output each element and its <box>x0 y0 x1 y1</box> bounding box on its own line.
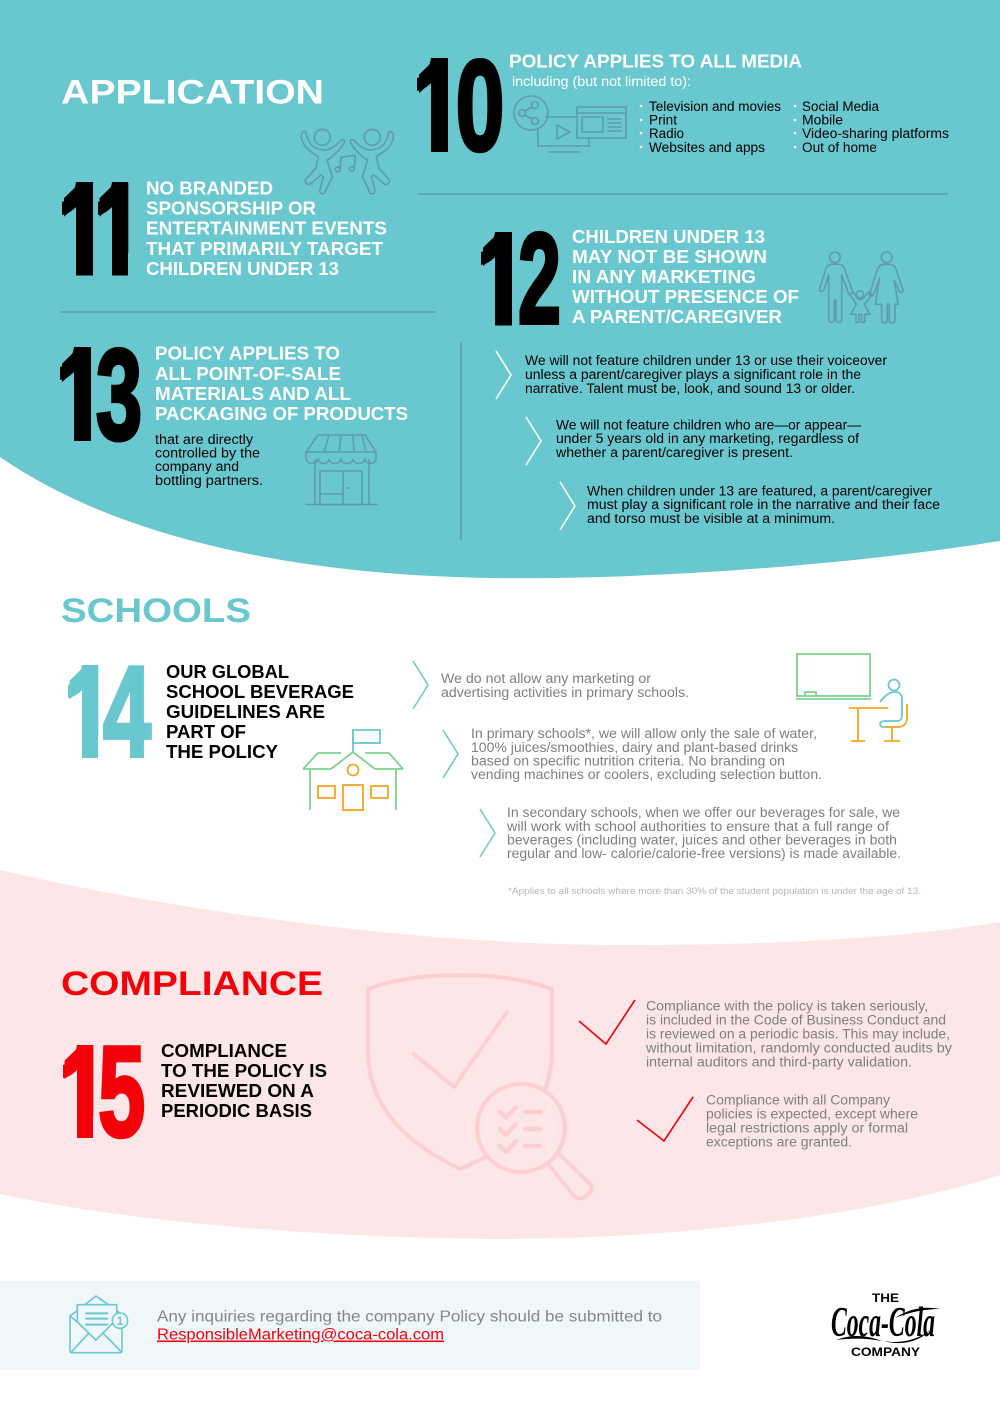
icon: check <box>579 1000 635 1044</box>
heading 11: CHILDREN UNDER 13 <box>146 259 339 279</box>
media list right column: Social Media <box>802 99 879 114</box>
media list right column: Mobile <box>802 112 843 128</box>
heading 12 <box>572 227 799 327</box>
bullet: no children under 5 <box>526 417 862 465</box>
text: We will not feature children under 13 or use their voiceover <box>525 353 888 368</box>
text: When children under 13 are featured, a parent/caregiver <box>587 484 933 498</box>
text <box>441 671 689 700</box>
heading 15: PERIODIC BASIS <box>161 1101 312 1121</box>
heading 14: OUR GLOBAL <box>166 662 289 682</box>
heading 11: SPONSORSHIP OR <box>146 198 316 218</box>
text 13 <box>155 432 263 488</box>
bullet: parent must play significant role <box>560 482 940 530</box>
heading 14 <box>166 662 354 762</box>
text: must play a significant role in the narrative and their face <box>587 497 940 512</box>
text: is included in the Code of Business Conduct and <box>646 1012 946 1028</box>
icon: school building <box>303 730 403 810</box>
footnote: *Applies to all schools where more than 30% of the student population is under the age of 13. <box>508 886 921 897</box>
text: internal auditors and third-party validation. <box>646 1054 912 1070</box>
heading 15: COMPLIANCE <box>161 1041 287 1061</box>
text <box>706 1092 918 1150</box>
text 13: company and <box>155 459 239 474</box>
heading 10: POLICY APPLIES TO ALL MEDIA <box>509 52 802 72</box>
bullet: primary school drinks <box>443 726 822 782</box>
text 13: bottling partners. <box>155 473 263 488</box>
heading 11: THAT PRIMARILY TARGET <box>146 239 383 259</box>
heading 12: WITHOUT PRESENCE OF <box>572 287 799 307</box>
text: We will not feature children who are—or appear— <box>556 418 862 432</box>
heading 13: MATERIALS AND ALL <box>155 384 351 404</box>
heading 12: MAY NOT BE SHOWN <box>572 247 767 267</box>
icon: family <box>820 252 903 323</box>
text: We do not allow any marketing or <box>441 671 652 686</box>
text: In primary schools*, we will allow only the sale of water, <box>471 726 817 741</box>
number 13: 1 <box>58 323 106 467</box>
text <box>587 484 940 526</box>
text: vending machines or coolers, excluding selection button. <box>471 767 822 782</box>
icon: dancing children <box>301 129 393 194</box>
media list left column: Print <box>649 112 677 128</box>
text: is reviewed on a periodic basis. This may include, <box>646 1026 950 1042</box>
chevron <box>496 351 511 399</box>
text <box>506 805 901 861</box>
chevron <box>443 730 458 778</box>
media list left column <box>640 99 781 155</box>
text: under 5 years old in any marketing, regardless of <box>556 431 859 446</box>
panel: contact footer <box>0 1281 700 1370</box>
number 11: 1 <box>95 158 143 302</box>
text: In secondary schools, when we offer our beverages for sale, we <box>507 805 900 820</box>
bullet: no children under 13 voiceover <box>496 351 888 399</box>
heading 11: ENTERTAINMENT EVENTS <box>146 219 387 239</box>
number 13: 3 <box>96 323 142 467</box>
panel: application background <box>0 0 1000 578</box>
heading 12: IN ANY MARKETING <box>572 267 756 287</box>
text: unless a parent/caregiver plays a significant role in the <box>525 367 861 382</box>
media list left column: Radio <box>649 126 684 141</box>
logo: The Coca-Cola Company <box>831 1291 940 1359</box>
panel: compliance background <box>0 870 1000 1239</box>
media list left column: Television and movies <box>649 99 781 114</box>
heading 15: TO THE POLICY IS <box>161 1061 327 1081</box>
icon: media screens <box>514 96 626 152</box>
heading 11: NO BRANDED <box>146 178 273 198</box>
heading 13 <box>155 344 408 424</box>
text: regular and low- calorie/calorie-free versions) is made available. <box>507 846 901 861</box>
bullet: compliance taken seriously <box>579 998 952 1070</box>
item 13: point of sale <box>50 323 408 504</box>
number 12: 2 <box>518 207 561 351</box>
heading 15 <box>161 1041 327 1121</box>
item 15: compliance reviewed <box>53 1020 327 1164</box>
text <box>471 726 822 782</box>
number 15: 1 <box>60 1020 108 1164</box>
text: policies is expected, except where <box>706 1106 918 1122</box>
icon: store <box>306 435 377 504</box>
heading 11 <box>146 178 387 279</box>
media list left column: Websites and apps <box>649 140 765 155</box>
heading: compliance: COMPLIANCE <box>61 965 323 1003</box>
number 10: 1 <box>414 34 462 178</box>
text: 100% juices/smoothies, dairy and plant-based drinks <box>471 740 798 755</box>
text: exceptions are granted. <box>706 1134 852 1150</box>
number 14: 4 <box>103 640 151 784</box>
chevron <box>560 482 575 530</box>
heading 14: THE POLICY <box>166 742 278 762</box>
icon: envelope <box>70 1296 128 1353</box>
icon: shield with magnifier <box>368 975 592 1198</box>
number 15: 5 <box>98 1020 145 1164</box>
item 11: no branded sponsorship <box>52 158 387 302</box>
text: and torso must be visible at a minimum. <box>587 511 835 526</box>
bullet: no marketing in primary schools <box>413 661 689 709</box>
subheading 10: including (but not limited to): <box>512 74 691 89</box>
media list right column <box>794 99 949 155</box>
item 10: policy applies to all media <box>407 34 949 178</box>
number 12: 1 <box>478 207 526 351</box>
text: beverages (including water, juices and other beverages in both <box>507 832 897 848</box>
number 14: 1 <box>65 640 113 784</box>
chevron <box>526 417 541 465</box>
icon: check <box>637 1097 693 1141</box>
heading: schools: SCHOOLS <box>61 592 251 630</box>
media list right column: Video-sharing platforms <box>802 126 949 141</box>
heading 14: PART OF <box>166 722 246 742</box>
media list right column: Out of home <box>802 140 877 155</box>
item 12: children under 13 <box>471 207 903 351</box>
heading 14: GUIDELINES ARE <box>166 702 325 722</box>
heading 13: ALL POINT-OF-SALE <box>155 364 341 384</box>
heading 13: PACKAGING OF PRODUCTS <box>155 404 408 424</box>
text: advertising activities in primary schools. <box>441 685 689 700</box>
logo: The Coca-Cola Company: THE <box>872 1291 899 1305</box>
number 11: 1 <box>60 158 108 302</box>
text <box>555 418 862 460</box>
text 13: that are directly <box>155 432 253 447</box>
heading: application: APPLICATION <box>61 74 324 112</box>
text: narrative. Talent must be, look, and sound 13 or older. <box>525 381 855 396</box>
contact text: Any inquiries regarding the company Policy should be submitted to <box>157 1308 662 1326</box>
number 10: 0 <box>456 34 504 178</box>
text: legal restrictions apply or formal <box>706 1120 908 1136</box>
text: will work with school authorities to ensure that a full range of <box>506 819 889 834</box>
logo: The Coca-Cola Company: COMPANY <box>851 1345 920 1359</box>
bullet: compliance with company policies <box>637 1092 918 1150</box>
heading 13: POLICY APPLIES TO <box>155 344 340 364</box>
text <box>645 998 952 1070</box>
text: whether a parent/caregiver is present. <box>555 445 793 460</box>
text: Compliance with the policy is taken seriously, <box>646 998 928 1014</box>
text: based on specific nutrition criteria. No branding on <box>471 754 785 768</box>
icon: envelope: 1 <box>117 1314 124 1328</box>
text: without limitation, randomly conducted audits by <box>645 1040 952 1056</box>
heading 15: REVIEWED ON A <box>161 1081 314 1101</box>
heading 12: CHILDREN UNDER 13 <box>572 227 765 247</box>
heading 12: A PARENT/CAREGIVER <box>572 307 782 327</box>
bullet: secondary school drinks <box>480 805 901 861</box>
text: Compliance with all Company <box>706 1092 890 1108</box>
contact email: ResponsibleMarketing@coca-cola.com <box>157 1326 444 1344</box>
icon: classroom <box>796 654 907 741</box>
heading 14: SCHOOL BEVERAGE <box>166 682 354 702</box>
item 14: school beverage guidelines <box>58 640 403 810</box>
chevron <box>480 809 495 857</box>
text <box>525 353 888 396</box>
text 13: controlled by the <box>155 446 260 460</box>
chevron <box>413 661 428 709</box>
